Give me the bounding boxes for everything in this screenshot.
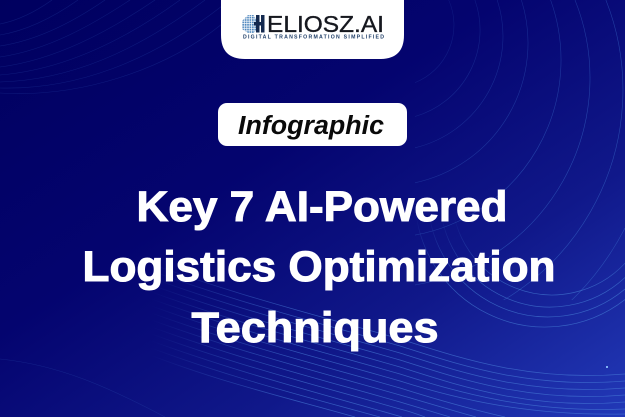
badge background: [218, 103, 407, 146]
badge label: Infographic: [238, 112, 384, 140]
title line 2: Logistics Optimization: [82, 243, 556, 291]
logo wordmark: ELIOSZ.AI: [267, 11, 384, 37]
upper-right concentric arcs: [415, 0, 625, 300]
logo panel: [221, 0, 404, 59]
lower-right arc lines: [418, 225, 625, 328]
bottom-left faint curve: [0, 359, 165, 417]
title: [82, 183, 556, 352]
title line 3: Techniques: [192, 304, 438, 352]
logo tagline: DIGITAL TRANSFORMATION SIMPLIFIED: [243, 34, 384, 40]
title line 1: Key 7 AI-Powered: [136, 183, 508, 231]
decorative star dot: [606, 366, 608, 368]
bottom wave lines: [170, 272, 625, 417]
top-left arc lines: [0, 0, 222, 94]
logo icon: [242, 15, 264, 33]
infographic badge: [218, 103, 407, 146]
logo card: [221, 0, 404, 59]
